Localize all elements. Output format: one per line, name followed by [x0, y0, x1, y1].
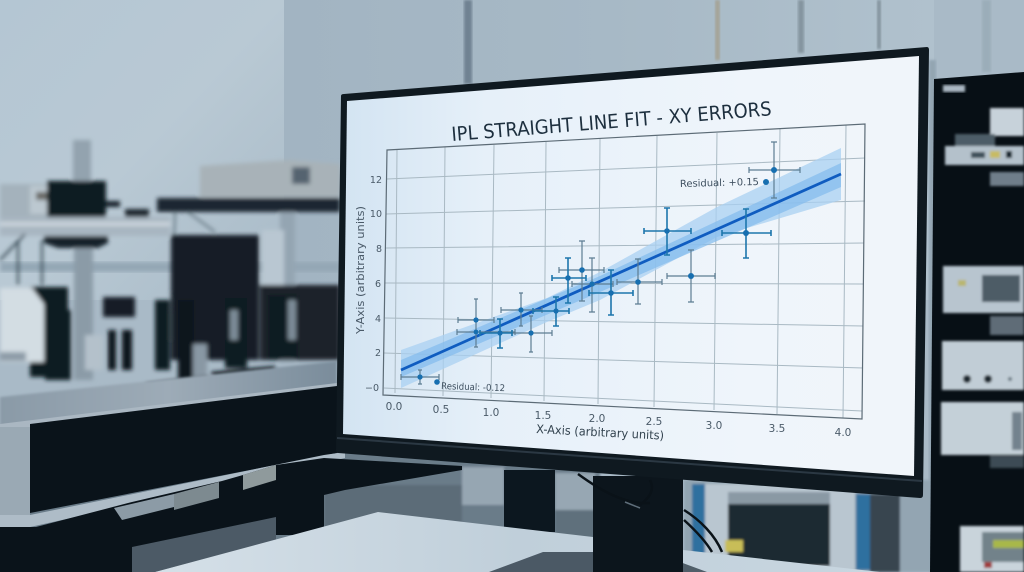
rack unit: control panel — [942, 341, 1024, 390]
y-axis tick labels: −0 — [365, 383, 379, 394]
monitor stand and cables — [489, 474, 722, 572]
background: optical table — [0, 361, 555, 572]
data points — [417, 167, 777, 385]
chart title: IPL STRAIGHT LINE FIT - XY ERRORS — [451, 97, 772, 146]
background: optical bench equipment — [0, 140, 340, 387]
confidence band: outer — [401, 148, 841, 388]
error bars: grey group — [401, 142, 800, 384]
chart: straight line fit with XY errors — [355, 124, 865, 443]
x-axis tick labels: 3.5 — [769, 423, 785, 435]
y-axis title: Y-Axis (arbitrary units) — [355, 206, 367, 335]
background: under-table floor — [0, 450, 600, 572]
x-axis tick labels: 1.5 — [535, 410, 551, 422]
monitor bezel — [336, 47, 929, 498]
x-axis tick labels: 3.0 — [706, 420, 722, 432]
x-axis tick labels: 0.5 — [433, 404, 449, 416]
rack unit: bottom instrument — [960, 526, 1024, 572]
plot frame — [383, 124, 865, 419]
y-axis tick labels: 12 — [370, 175, 382, 186]
x-axis tick labels: 2.5 — [646, 416, 662, 428]
rack unit: display instrument — [943, 266, 1024, 335]
fit line — [401, 174, 841, 370]
y-axis tick labels: 6 — [375, 279, 381, 290]
y-axis tick labels: 10 — [370, 209, 382, 220]
residual annotation: lower: Residual: -0.12 — [441, 381, 505, 394]
monitor bezel lower highlight — [337, 437, 922, 482]
x-axis tick labels: 1.0 — [483, 407, 499, 419]
y-axis tick labels: 8 — [376, 244, 382, 255]
residual annotation: upper: Residual: +0.15 — [680, 177, 759, 190]
x-axis tick labels: 2.0 — [589, 413, 605, 425]
x-axis tick labels: 0.0 — [386, 401, 402, 413]
y-axis tick labels: 4 — [375, 314, 381, 325]
y-axis tick labels: 2 — [375, 348, 381, 359]
rack unit: network switch — [945, 108, 1024, 186]
y-axis tick labels — [365, 175, 382, 394]
x-axis title: X-Axis (arbitrary units) — [536, 422, 664, 443]
error bars: blue group — [480, 208, 771, 348]
desk surface — [155, 512, 880, 572]
x-axis tick labels: 4.0 — [835, 427, 851, 439]
monitor screen — [343, 56, 919, 476]
chart grid lines — [384, 125, 865, 418]
rack unit: power supply — [941, 402, 1024, 468]
confidence band: inner — [401, 163, 841, 377]
background: equipment rack — [929, 60, 1024, 572]
x-axis tick labels — [386, 401, 851, 439]
background: rear instruments under monitor — [684, 480, 934, 572]
